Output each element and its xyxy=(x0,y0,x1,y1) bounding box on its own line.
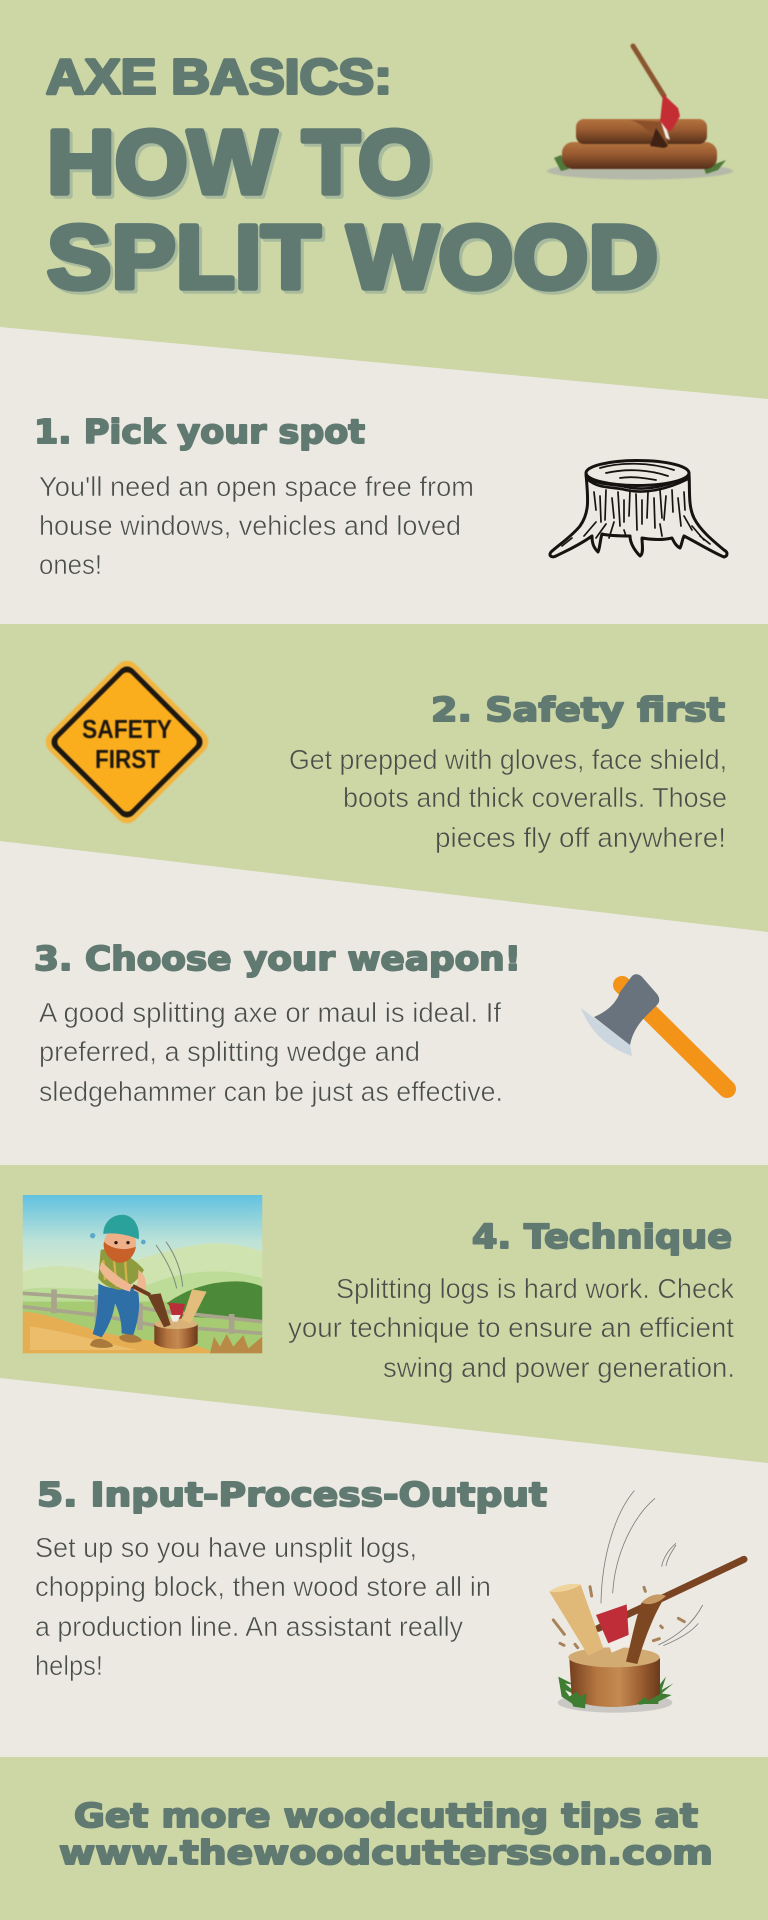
footer call to action: Get more woodcutting tips at xyxy=(74,1796,698,1835)
text: step 2 body: Get prepped with gloves, face shield, xyxy=(289,744,727,775)
sign text: SAFETY xyxy=(82,714,172,744)
icon: axe splitting log on block xyxy=(549,1491,744,1713)
icon: safety first sign xyxy=(41,656,213,828)
text: step 5 body: chopping block, then wood store all in xyxy=(35,1571,491,1602)
text: step 3 body xyxy=(39,997,503,1107)
icon: axe in logs xyxy=(547,46,733,180)
text: step 3 body: A good splitting axe or maul is ideal. If xyxy=(39,997,501,1028)
text: step 1 body: ones! xyxy=(39,549,102,580)
woodcutter figure xyxy=(90,1215,150,1348)
text: step 4 body: swing and power generation. xyxy=(383,1352,735,1383)
panel: footer xyxy=(59,1796,713,1872)
footer call to action xyxy=(59,1796,713,1872)
icon: axe xyxy=(581,974,727,1089)
panel background xyxy=(0,1378,768,1757)
text: step 5 body: a production line. An assistant really xyxy=(35,1611,463,1642)
text: step 2 body xyxy=(289,744,727,853)
heading: step 1: 1. Pick your spot xyxy=(34,412,365,451)
panel: step 2 xyxy=(41,656,727,853)
footer call to action: www.thewoodcuttersson.com xyxy=(59,1833,713,1872)
illustration: woodcutter chopping xyxy=(23,1195,262,1353)
heading: step 3: 3. Choose your weapon! xyxy=(34,939,521,978)
title: how to split wood xyxy=(47,113,658,308)
title: how to split wood: SPLIT WOOD xyxy=(47,208,658,308)
title: how to split wood: HOW TO xyxy=(47,113,431,213)
chopping block xyxy=(147,1242,207,1349)
icon: tree stump xyxy=(550,460,727,557)
sign text: FIRST xyxy=(95,744,160,774)
panel: step 1 xyxy=(0,327,768,624)
panel: header xyxy=(46,46,733,308)
heading: step 2: 2. Safety first xyxy=(431,690,725,729)
heading: step 4: 4. Technique xyxy=(472,1217,732,1256)
text: step 4 body xyxy=(288,1273,735,1383)
panel background xyxy=(0,841,768,1165)
text: step 5 body: Set up so you have unsplit logs, xyxy=(35,1532,417,1563)
text: step 4 body: Splitting logs is hard work. Check xyxy=(336,1273,735,1304)
text: step 4 body: your technique to ensure an efficient xyxy=(288,1312,734,1343)
text: step 2 body: pieces fly off anywhere! xyxy=(435,822,726,853)
panel: step 5 xyxy=(0,1378,768,1757)
panel background xyxy=(0,327,768,624)
panel: step 3 xyxy=(0,841,768,1165)
text: step 1 body xyxy=(39,471,474,580)
text: step 3 body: preferred, a splitting wedge and xyxy=(39,1036,420,1067)
title: axe basics: AXE BASICS: xyxy=(46,50,392,104)
text: step 2 body: boots and thick coveralls. Those xyxy=(343,782,727,813)
text: step 1 body: house windows, vehicles and loved xyxy=(39,510,461,541)
text: step 3 body: sledgehammer can be just as effective. xyxy=(39,1076,503,1107)
sign text xyxy=(82,714,172,774)
panel: step 4 xyxy=(23,1195,735,1383)
text: step 5 body xyxy=(35,1532,491,1681)
text: step 5 body: helps! xyxy=(35,1650,103,1681)
heading: step 5: 5. Input-Process-Output xyxy=(37,1475,547,1514)
text: step 1 body: You'll need an open space free from xyxy=(39,471,474,502)
